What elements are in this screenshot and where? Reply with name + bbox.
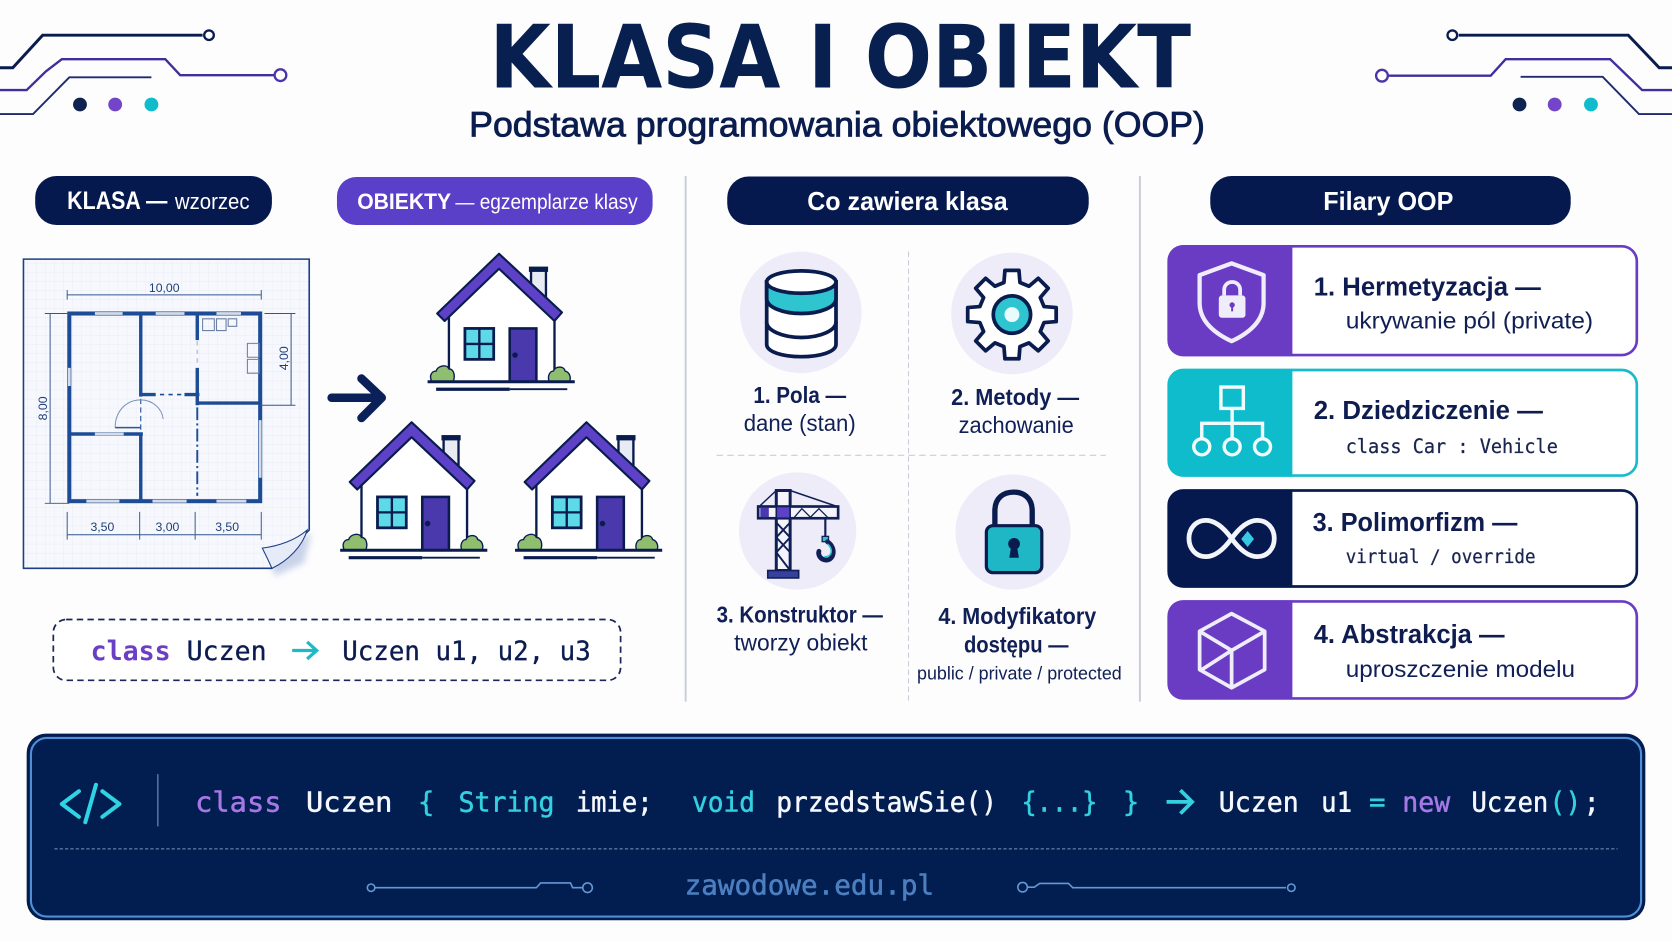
card: abstrakcja: 4. Abstrakcja —: [1314, 621, 1505, 649]
code line: ;: [1583, 787, 1600, 818]
item: modyfikatory: dostępu —: [964, 632, 1069, 658]
code line: Uczen: [306, 787, 392, 818]
dashed code box: Uczen u1, u2, u3: [342, 636, 591, 667]
item: metody: zachowanie: [959, 412, 1074, 438]
dimensions: [45, 290, 295, 540]
code line: Uczen: [1472, 787, 1548, 818]
code line: {: [418, 787, 434, 818]
floor plan walls: [69, 314, 260, 501]
card: dziedziczenie: class Car : Vehicle: [1346, 435, 1558, 458]
card: polimorfizm: virtual / override: [1346, 547, 1536, 568]
item: konstruktor: tworzy obiekt: [734, 629, 868, 655]
title: KLASA I OBIEKT: [489, 6, 1191, 108]
icon: cube: [1200, 614, 1265, 688]
pill: obiekty egzemplarze: — egzemplarze klasy: [455, 190, 638, 214]
item: konstruktor: 3. Konstruktor —: [717, 602, 883, 628]
blueprint: 10,00: [149, 281, 180, 295]
house top: [428, 254, 575, 389]
panel: co zawiera klasa: [717, 176, 1122, 702]
code line: Uczen: [1219, 787, 1299, 818]
house bottom right: [515, 422, 662, 558]
card: abstrakcja: [1168, 600, 1637, 700]
code line: (): [1549, 787, 1581, 818]
icon: database: [767, 271, 836, 357]
circuit right: [1018, 882, 1295, 892]
icon: gear: [968, 270, 1056, 359]
code line: {...}: [1022, 787, 1097, 818]
card: hermetyzacja: 1. Hermetyzacja —: [1314, 273, 1541, 301]
item: metody: [951, 253, 1079, 438]
panel: klasa i obiekty: [23, 176, 662, 680]
pill: obiekty egzemplarze: OBIEKTY: [357, 189, 451, 214]
card: polimorfizm: [1168, 489, 1637, 588]
dashed code box: [53, 620, 621, 680]
blueprint: 3,00: [155, 520, 180, 534]
panel: code bar: [27, 734, 1645, 920]
item: metody: 2. Metody —: [951, 384, 1079, 410]
circuit left: [367, 883, 592, 893]
item: pola: dane (stan): [744, 410, 856, 436]
blueprint: 8,00: [36, 396, 50, 420]
icon: hierarchy: [1194, 387, 1271, 455]
code line: [195, 787, 1600, 818]
code line: void: [692, 787, 755, 818]
item: modyfikatory: public / private / protected: [917, 662, 1122, 683]
page curl: [262, 530, 307, 568]
circuit decoration left: [0, 30, 286, 114]
card: dziedziczenie: [1168, 369, 1637, 477]
item: modyfikatory: 4. Modyfikatory: [938, 603, 1096, 629]
pill: klasa wzorzec: [35, 176, 272, 225]
code line: class: [195, 787, 282, 818]
card: polimorfizm: 3. Polimorfizm —: [1313, 509, 1518, 537]
icon: shield: [1200, 263, 1264, 341]
code line: u1: [1321, 787, 1352, 818]
dashed code box: class: [91, 636, 171, 667]
card: hermetyzacja: ukrywanie pól (private): [1346, 307, 1593, 333]
divider left: [685, 176, 687, 702]
icon: code brackets: [62, 785, 119, 822]
blueprint: 3,50: [215, 520, 239, 534]
item: konstruktor: [717, 472, 883, 655]
blueprint: 3,50: [90, 520, 114, 534]
blueprint: 4,00: [277, 346, 291, 370]
icon: padlock: [986, 492, 1042, 573]
card: dziedziczenie: 2. Dziedziczenie —: [1314, 397, 1543, 425]
divider right: [1139, 176, 1141, 702]
panel: filary oop: [1168, 176, 1637, 700]
footer url: zawodowe.edu.pl: [685, 869, 934, 902]
pill heading: Co zawiera klasa: [807, 186, 1008, 216]
circuit decoration right: [1376, 30, 1672, 114]
code line: imie;: [576, 787, 653, 818]
house bottom left: [340, 422, 487, 558]
pill heading: [1210, 176, 1571, 225]
card: hermetyzacja: [1168, 245, 1637, 356]
code line: przedstawSie(): [776, 787, 997, 818]
pill: klasa wzorzec: KLASA —: [67, 188, 168, 215]
card: abstrakcja: uproszczenie modelu: [1346, 656, 1575, 682]
pill: obiekty egzemplarze: [337, 177, 653, 225]
pill heading: [727, 176, 1089, 225]
dashed code box: Uczen: [187, 636, 267, 667]
code line: String: [459, 787, 554, 818]
item: pola: 1. Pola —: [753, 382, 846, 408]
pill heading: Filary OOP: [1323, 186, 1453, 216]
code line: }: [1123, 787, 1139, 818]
item: modyfikatory: [917, 475, 1122, 683]
icon: crane: [758, 491, 838, 578]
item: pola: [740, 252, 862, 436]
icon: infinity: [1189, 520, 1274, 557]
pill: klasa wzorzec: wzorzec: [174, 189, 250, 214]
code line: =: [1369, 787, 1386, 818]
blueprint: [23, 259, 311, 576]
arrow to objects: [332, 379, 382, 418]
code line: new: [1402, 787, 1451, 818]
subtitle: Podstawa programowania obiektowego (OOP): [469, 105, 1205, 144]
arrow in code: [1167, 790, 1192, 814]
